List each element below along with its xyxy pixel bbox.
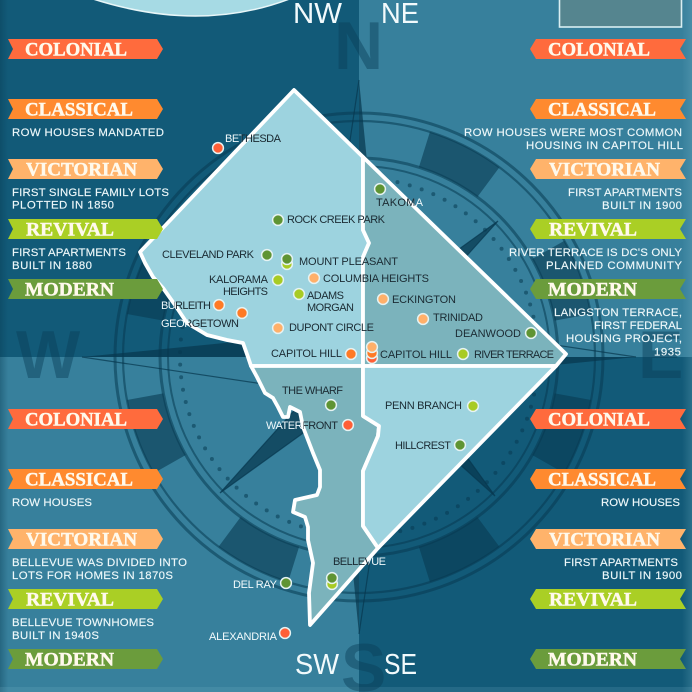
ribbon: classical (8, 99, 163, 120)
text: victorian note (568, 187, 682, 212)
text: revival note (509, 247, 682, 272)
ribbon: modern: MODERN (25, 650, 115, 670)
marker: Hillcrest: HILLCREST (395, 440, 451, 452)
map markers and place names (161, 133, 554, 643)
ribbon: colonial (530, 409, 686, 430)
ribbon: victorian: VICTORIAN (26, 530, 138, 550)
ribbon: colonial: COLONIAL (25, 410, 127, 430)
marker: Adams Morgan: ADAMS (307, 290, 344, 302)
marker: Capitol Hill west: CAPITOL HILL (271, 348, 342, 360)
text: victorian note: BUILT IN 1900 (602, 200, 682, 212)
text: victorian note: BELLEVUE WAS DIVIDED INTO (12, 557, 187, 569)
text: classical note: ROW HOUSES WERE MOST COMMON (464, 127, 682, 139)
text: revival note (12, 617, 154, 642)
text: victorian note: FIRST APARTMENTS (564, 557, 678, 569)
marker: Takoma: TAKOMA (376, 197, 424, 209)
ribbon: victorian: VICTORIAN (549, 160, 661, 180)
marker: The Wharf: THE WHARF (282, 385, 343, 397)
compass letter E: E (638, 317, 683, 393)
ribbon: victorian (530, 159, 686, 180)
ribbon: colonial: COLONIAL (25, 40, 127, 60)
marker: Bellevue: BELLEVUE (333, 556, 386, 568)
map region SW (251, 366, 379, 625)
text: revival note: RIVER TERRACE IS DC'S ONLY (509, 247, 682, 259)
text: revival note: BUILT IN 1940S (12, 630, 99, 642)
ribbon: modern (530, 649, 686, 670)
marker: Adams Morgan (294, 289, 354, 314)
text: victorian note: FIRST APARTMENTS (568, 187, 682, 199)
quadrant label SW: SW (295, 649, 340, 681)
marker: Georgetown: GEORGETOWN (161, 318, 239, 330)
marker: Mount Pleasant: MOUNT PLEASANT (299, 256, 398, 268)
marker: Kalorama Heights: KALORAMA (209, 274, 269, 286)
text: revival note: BELLEVUE TOWNHOMES (12, 617, 154, 629)
text: modern note (554, 307, 682, 358)
ribbon: colonial (530, 39, 686, 60)
marker: Columbia Heights: COLUMBIA HEIGHTS (323, 273, 429, 285)
ribbon: victorian: VICTORIAN (549, 530, 661, 550)
panel: NW timeline (8, 39, 169, 300)
ribbon: victorian (530, 529, 686, 550)
marker: Alexandria (209, 628, 290, 643)
ribbon: classical (530, 469, 686, 490)
text: victorian note (564, 557, 682, 582)
ribbon: modern (8, 649, 163, 670)
text: victorian note: PLOTTED IN 1850 (12, 200, 114, 212)
marker: River Terrace: RIVER TERRACE (474, 349, 554, 361)
ribbon: modern (530, 279, 686, 300)
ribbon: revival: REVIVAL (26, 220, 114, 240)
text: revival note: BUILT IN 1880 (12, 260, 92, 272)
ribbon: modern: MODERN (548, 650, 638, 670)
ribbon: classical: CLASSICAL (548, 470, 656, 490)
marker: Kalorama Heights: HEIGHTS (223, 286, 268, 298)
marker: Del Ray (233, 578, 291, 591)
ribbon: modern: MODERN (548, 280, 638, 300)
text: victorian note: FIRST SINGLE FAMILY LOTS (12, 187, 169, 199)
marker: Capitol Hill east: CAPITOL HILL (380, 349, 452, 361)
marker: Georgetown (161, 308, 247, 330)
ribbon: classical (8, 469, 163, 490)
marker: Penn Branch: PENN BRANCH (385, 400, 462, 412)
marker: Burleith: BURLEITH (161, 300, 211, 312)
text: victorian note (12, 557, 187, 582)
ribbon: colonial: COLONIAL (548, 40, 650, 60)
map of Washington DC (140, 90, 566, 625)
marker: Bethesda (213, 133, 282, 153)
marker: Bethesda: BETHESDA (225, 133, 282, 145)
ribbon: modern (8, 279, 163, 300)
marker: Kalorama Heights (209, 274, 283, 298)
compass rose (82, 80, 636, 634)
marker: Del Ray: DEL RAY (233, 579, 278, 591)
ribbon: revival: REVIVAL (549, 590, 637, 610)
text: classical note: ROW HOUSES (601, 497, 680, 509)
map region SE (363, 366, 556, 548)
marker: The Wharf (282, 385, 343, 410)
marker: Adams Morgan: MORGAN (307, 302, 354, 314)
text: victorian note: LOTS FOR HOMES IN 1870S (12, 570, 173, 582)
top left shape (90, 0, 292, 16)
text: modern note: FIRST FEDERAL (594, 320, 682, 332)
text: revival note: FIRST APARTMENTS (12, 247, 126, 259)
marker: Eckington: ECKINGTON (392, 294, 456, 306)
text: victorian note: BUILT IN 1900 (602, 570, 682, 582)
ribbon: revival: REVIVAL (549, 220, 637, 240)
marker: Bellevue (327, 556, 386, 589)
text: modern note: LANGSTON TERRACE, (554, 307, 682, 319)
ribbon: victorian (8, 529, 163, 550)
ribbon: colonial (8, 409, 163, 430)
ribbon: revival (530, 219, 686, 240)
marker: Dupont Circle: DUPONT CIRCLE (289, 322, 374, 334)
text: classical note: HOUSING IN CAPITOL HILL (526, 140, 683, 152)
panel: NE timeline (464, 39, 686, 358)
marker: Trinidad: TRINIDAD (433, 312, 483, 324)
quadrant label SE: SE (384, 649, 417, 681)
map region NE (363, 157, 566, 366)
marker: Mount Pleasant (282, 254, 398, 269)
ribbon: modern: MODERN (25, 280, 115, 300)
ribbon: colonial: COLONIAL (548, 410, 650, 430)
ribbon: revival (8, 219, 163, 240)
text: classical note: ROW HOUSES MANDATED (12, 127, 164, 139)
marker: Cleveland Park: CLEVELAND PARK (162, 249, 255, 261)
marker: Alexandria: ALEXANDRIA (209, 631, 278, 643)
ribbon: classical: CLASSICAL (548, 100, 656, 120)
text: modern note: 1935 (654, 346, 681, 358)
ribbon: classical (530, 99, 686, 120)
ribbon: victorian (8, 159, 163, 180)
map region NW (140, 90, 369, 366)
text: modern note: HOUSING PROJECT, (566, 333, 682, 345)
ribbon: classical: CLASSICAL (25, 100, 133, 120)
marker: Waterfront: WATERFRONT (266, 420, 338, 432)
text: revival note (12, 247, 126, 272)
ribbon: revival (530, 589, 686, 610)
marker: Rock Creek Park: ROCK CREEK PARK (287, 214, 386, 226)
panel: SE timeline (530, 409, 686, 670)
compass letter W: W (16, 317, 81, 393)
marker: Capitol Hill east (367, 342, 452, 363)
ribbon: revival: REVIVAL (26, 590, 114, 610)
ribbon: revival (8, 589, 163, 610)
text: classical note (464, 127, 683, 152)
marker: Deanwood: DEANWOOD (455, 328, 521, 340)
panel: SW timeline (8, 409, 187, 670)
compass letter N: N (334, 8, 383, 84)
top right box (560, 0, 682, 27)
text: revival note: PLANNED COMMUNITY (546, 260, 682, 272)
ribbon: victorian: VICTORIAN (26, 160, 138, 180)
ribbon: classical: CLASSICAL (25, 470, 133, 490)
text: classical note: ROW HOUSES (12, 497, 92, 509)
text: victorian note (12, 187, 169, 212)
ribbon: colonial (8, 39, 163, 60)
marker: Takoma (375, 184, 424, 209)
